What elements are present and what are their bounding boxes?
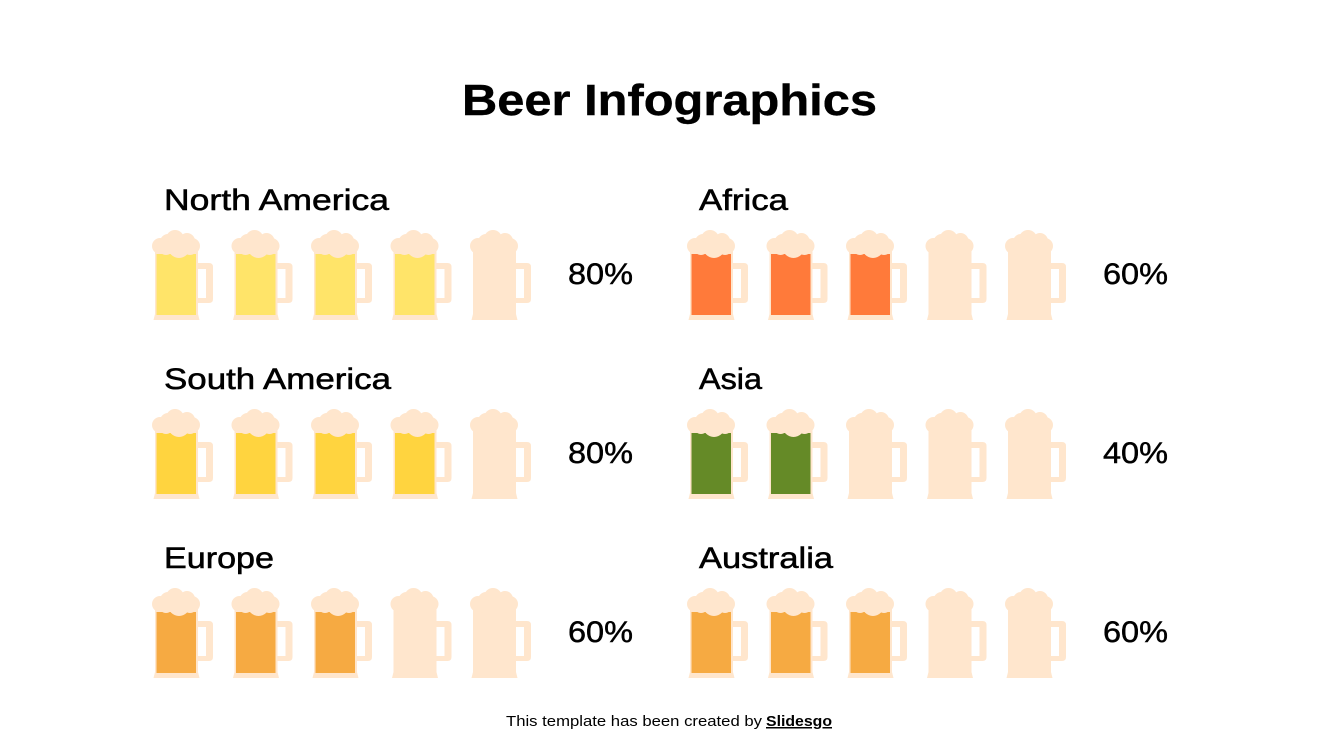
footer credit: Slidesgo [766,713,832,730]
heading: South America: South America [164,363,391,396]
icons: beer mugs 4 of 5 filled [152,409,531,499]
icons: beer mugs 3 of 5 filled [687,588,1066,678]
icons: beer mugs 2 of 5 filled [687,409,1066,499]
heading: Africa: Africa [699,184,788,217]
value: 80%: 80% [568,258,633,291]
title: Beer Infographics [462,76,877,125]
value: 60%: 60% [568,616,633,649]
panel: South America [152,363,633,499]
heading: Asia: Asia [699,363,762,396]
icons: beer mugs 3 of 5 filled [152,588,531,678]
footer credit: This template has been created by [506,713,763,730]
icons: beer mugs 4 of 5 filled [152,230,531,320]
panel: Australia [687,542,1168,678]
panel: Europe [152,542,633,678]
panel: North America [152,184,633,320]
icons: beer mugs 3 of 5 filled [687,230,1066,320]
heading: Australia: Australia [699,542,833,575]
value: 40%: 40% [1103,437,1168,470]
heading: North America: North America [164,184,389,217]
heading: Europe: Europe [164,542,274,575]
panel: Asia [687,363,1168,499]
panel: Africa [687,184,1168,320]
value: 80%: 80% [568,437,633,470]
value: 60%: 60% [1103,616,1168,649]
value: 60%: 60% [1103,258,1168,291]
